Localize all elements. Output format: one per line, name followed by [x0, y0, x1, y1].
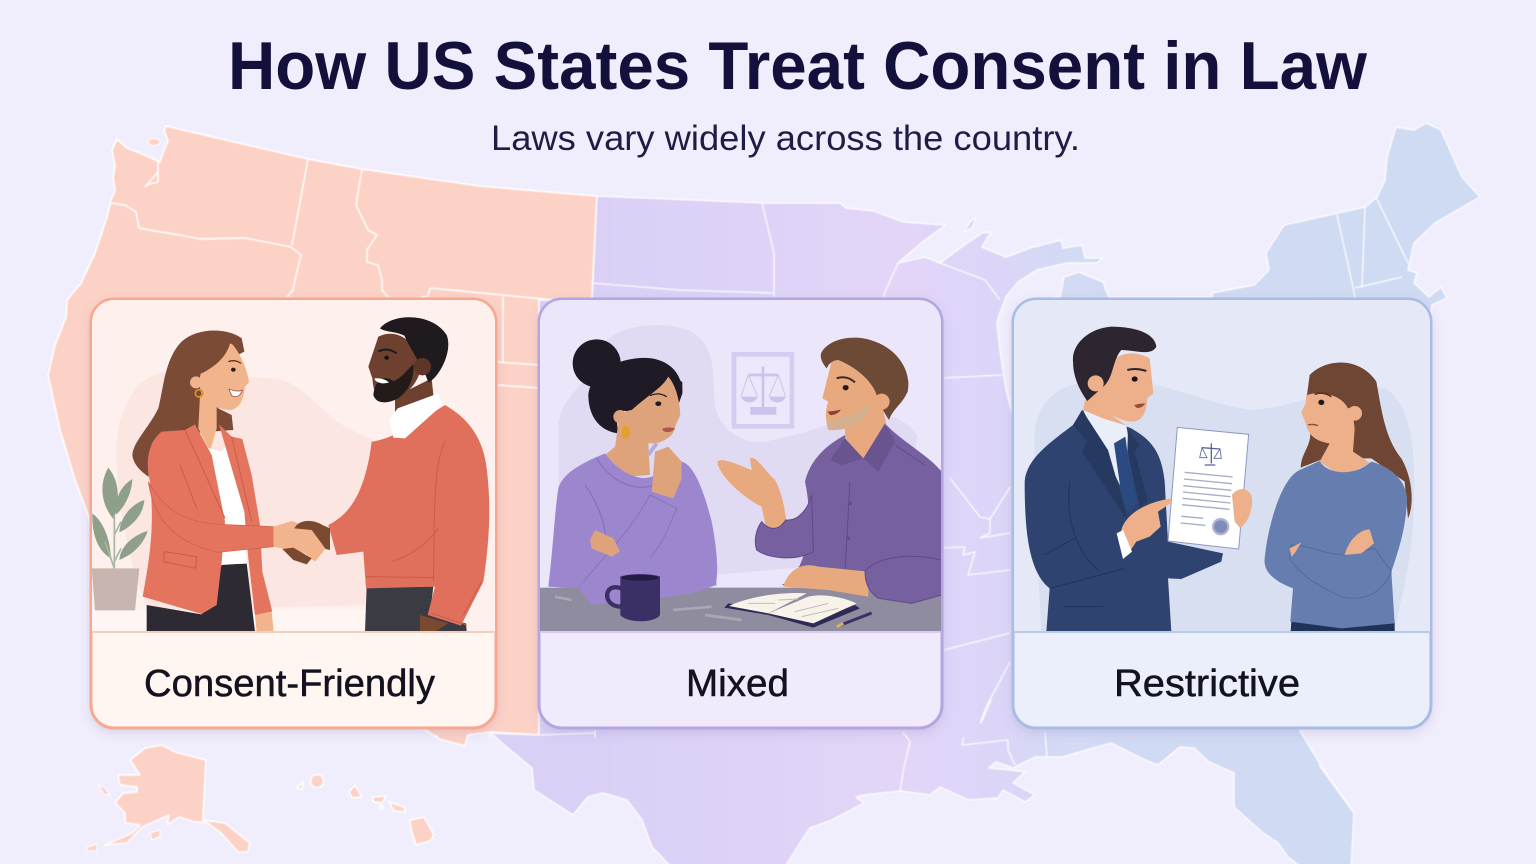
woman: [132, 331, 244, 477]
mug: [607, 587, 621, 607]
table: [540, 588, 942, 633]
divider: [540, 631, 941, 633]
caption: Consent-Friendly: [144, 663, 435, 705]
card frame: [1013, 299, 1431, 728]
arm raised: [718, 458, 786, 528]
card frame: [539, 299, 942, 728]
illustration: discussion at table: [535, 295, 950, 633]
paper: [1168, 427, 1249, 549]
man: [782, 424, 941, 586]
man: [1025, 410, 1223, 632]
Alaska: [105, 745, 250, 852]
book: [724, 603, 860, 628]
subtitle: Laws vary widely across the country.: [491, 119, 1080, 158]
scales poster: [734, 354, 792, 426]
plant: [92, 468, 148, 560]
illustration: handshake: [85, 295, 505, 632]
panel: mixed: [535, 295, 950, 728]
Alaska islands: [86, 785, 160, 851]
illustration: lawyer with document: [1008, 295, 1438, 632]
caption: Mixed: [686, 663, 789, 705]
pencil: [839, 613, 872, 626]
card frame: [91, 299, 496, 728]
Hawaii: [297, 774, 434, 845]
divider: [92, 631, 495, 633]
handshake: [273, 521, 326, 562]
woman: [573, 339, 621, 387]
panel: consent-friendly: [85, 295, 505, 728]
map region: mixed centre and restrictive east: [491, 123, 1480, 864]
US map background: [48, 123, 1480, 864]
caption: Restrictive: [1114, 663, 1300, 705]
man: [365, 587, 467, 632]
panel: restrictive: [1008, 295, 1438, 728]
title: How US States Treat Consent in Law: [228, 28, 1368, 104]
map region: consent-friendly west: [48, 126, 597, 746]
woman: [1301, 363, 1412, 518]
hands: [1232, 489, 1252, 528]
divider: [1014, 631, 1430, 633]
